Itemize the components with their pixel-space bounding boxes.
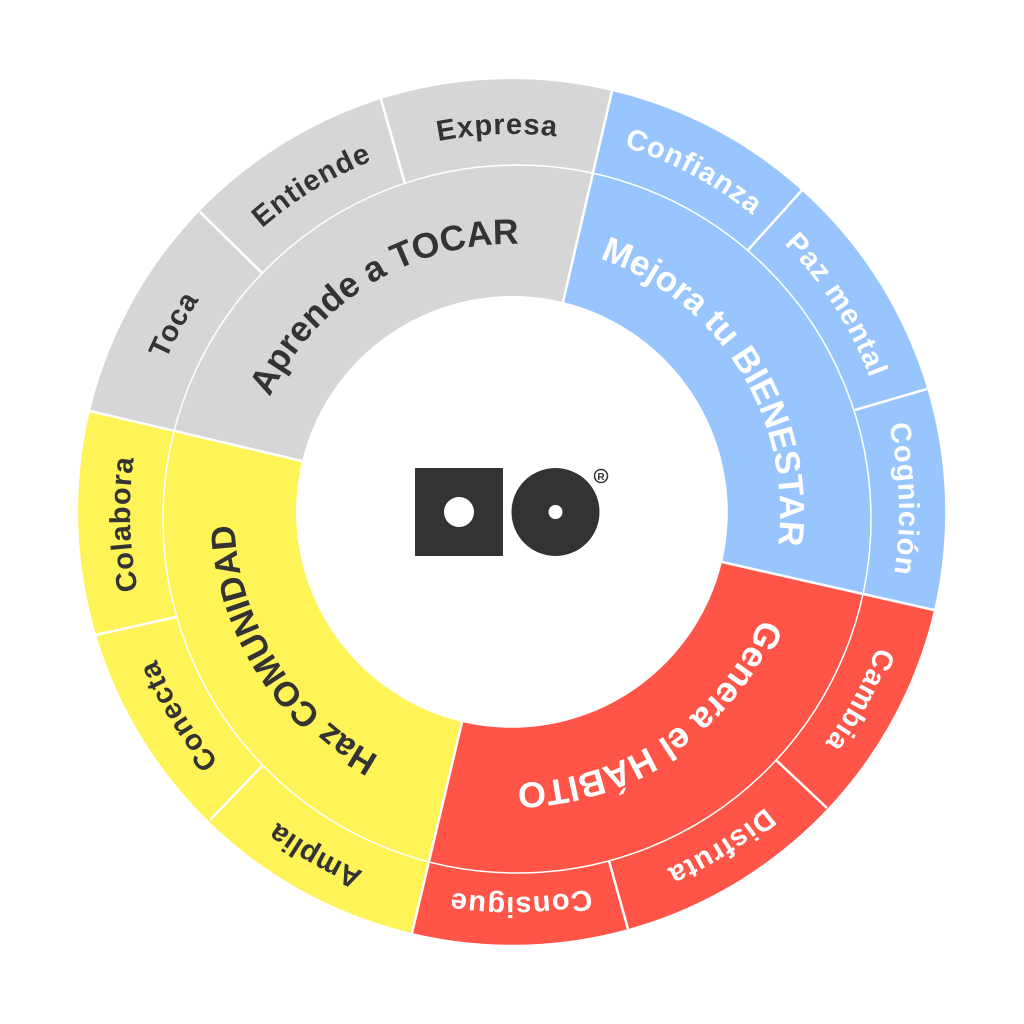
label: Colabora: Colabora <box>109 458 136 592</box>
panel: Aprende a TOCAR <box>90 79 612 460</box>
label: Consigue: Consigue <box>452 890 592 918</box>
label: Cognición: Cognición <box>890 423 920 573</box>
label: Confianza: Confianza <box>628 130 758 216</box>
panel: Genera el HÁBITO <box>412 562 934 945</box>
logo <box>415 468 608 556</box>
heading: Genera el HÁBITO: Genera el HÁBITO <box>519 623 780 808</box>
label: Expresa: Expresa <box>436 118 557 142</box>
heading: Mejora tu BIENESTAR: Mejora tu BIENESTAR <box>602 236 804 545</box>
panel: Haz COMUNIDAD <box>78 411 462 933</box>
heading: Haz COMUNIDAD: Haz COMUNIDAD <box>212 526 377 776</box>
label: Paz mental: Paz mental <box>785 231 889 376</box>
label: Disfruta: Disfruta <box>667 808 776 880</box>
label: Toca: Toca <box>148 295 199 354</box>
label: Conecta: Conecta <box>144 660 214 770</box>
label: Entiende: Entiende <box>250 148 370 227</box>
logo: R <box>597 472 605 483</box>
label: Cambia: Cambia <box>825 650 893 748</box>
heading: Aprende a TOCAR: Aprende a TOCAR <box>252 220 518 396</box>
panel: Mejora tu BIENESTAR <box>563 91 946 610</box>
label: Amplia: Amplia <box>272 822 362 887</box>
